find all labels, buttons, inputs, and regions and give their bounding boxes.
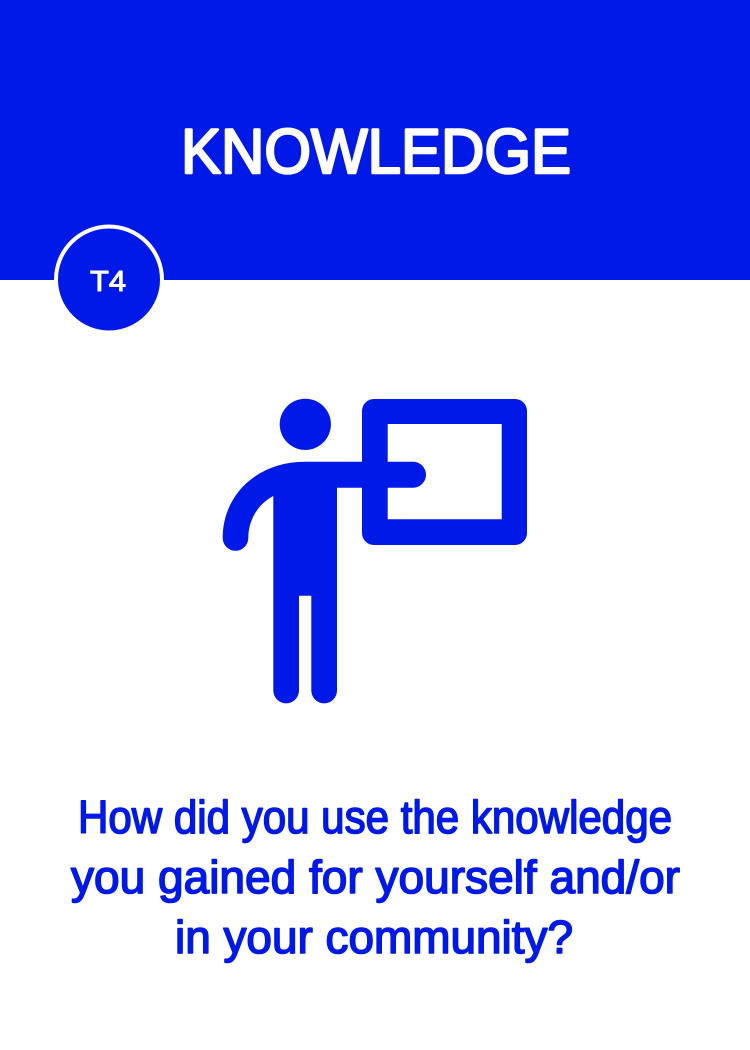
icon: person pointing at board xyxy=(223,399,527,703)
question line 1: How did you use the knowledge xyxy=(78,791,672,843)
header band xyxy=(0,0,750,280)
title: KNOWLEDGE xyxy=(181,117,571,187)
icon: head xyxy=(280,399,331,450)
icon: body and arms xyxy=(223,462,426,703)
icon: board xyxy=(362,399,527,545)
question text xyxy=(71,791,680,963)
badge: T4 xyxy=(56,226,162,332)
question line 3: in your community? xyxy=(175,911,573,963)
badge: T4: T4 xyxy=(90,266,126,298)
question line 2: you gained for yourself and/or xyxy=(71,851,680,903)
